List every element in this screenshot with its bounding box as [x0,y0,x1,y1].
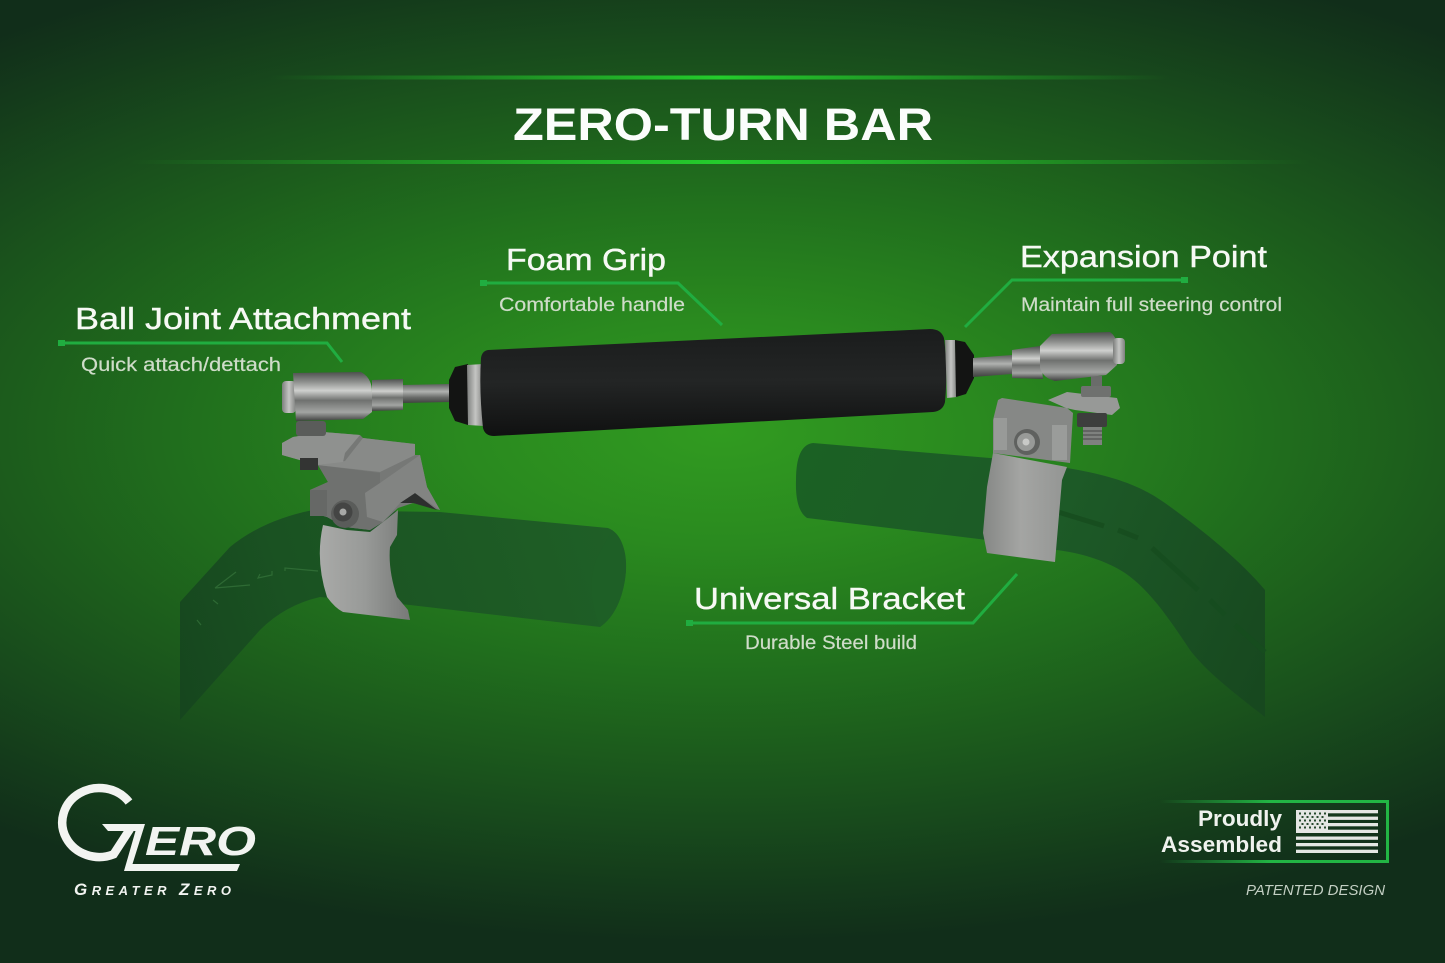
side plate [1048,392,1120,415]
left handlebar tube [180,510,626,720]
callout: Universal Bracket: Universal Bracket [694,581,965,616]
callout: Expansion Point: Maintain full steering control [1021,295,1282,316]
logo wordmark: ERO [145,818,256,864]
badge: Proudly Assembled [1160,802,1388,862]
logo mark [62,788,130,857]
foam grip [480,329,946,436]
left clamp bracket [282,421,440,620]
dark under shadow [400,493,437,510]
badge: Proudly Assembled: Assembled [1161,832,1282,857]
title [130,76,1310,164]
tagline: G REATER Z ERO [74,880,231,899]
bracket block [993,398,1073,463]
block silhouette [282,432,440,530]
icon: US flag [1296,810,1378,853]
band [320,510,410,620]
callout: Foam Grip [480,242,722,325]
callout: Ball Joint Attachment: Quick attach/dettach [81,355,281,376]
callout: Expansion Point: Expansion Point [1020,239,1267,274]
callout: Expansion Point [965,239,1282,327]
right collar [945,340,974,398]
callout: Universal Bracket: Durable Steel build [745,633,917,654]
nut [296,421,326,436]
left rod [403,384,449,403]
logo: Greater Zero [62,788,256,899]
left ball joint [282,372,403,421]
bolt [1014,429,1040,455]
right handlebar tube [796,443,1265,717]
right rod [973,355,1012,377]
callout: Universal Bracket [686,574,1017,654]
callout: Ball Joint Attachment: Ball Joint Attachment [75,301,411,336]
patented design note: PATENTED DESIGN [1246,883,1386,899]
right side face [365,455,440,522]
lower front face [310,465,383,530]
band [983,453,1067,562]
zero-turn bar [282,329,1125,436]
badge: Proudly Assembled: Proudly [1198,806,1283,831]
callout: Ball Joint Attachment [58,301,411,376]
callout: Foam Grip: Foam Grip [506,242,666,277]
left collar [449,364,484,426]
bolt [331,500,359,528]
right ball joint [1012,332,1125,381]
arm plate [282,432,360,465]
callout: Foam Grip: Comfortable handle [499,295,685,316]
right clamp bracket [983,376,1120,562]
top face [317,438,415,472]
title: ZERO-TURN BAR [513,99,933,150]
